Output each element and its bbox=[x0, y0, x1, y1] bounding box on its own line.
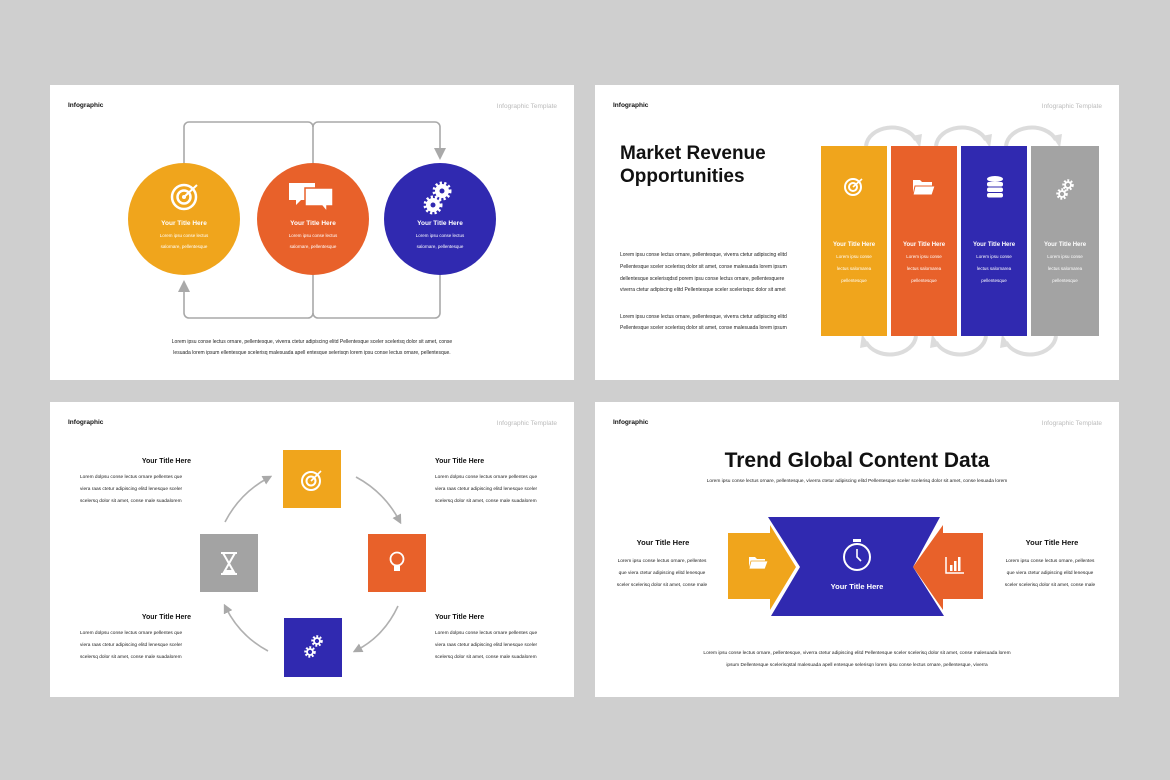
circle: orange: Lorem ipsu conse lectus bbox=[289, 233, 338, 238]
square: gray bbox=[200, 534, 258, 592]
body text bbox=[172, 339, 452, 356]
arrow: orange bbox=[913, 525, 983, 610]
text block: left bbox=[617, 538, 708, 588]
bar: blue: lectus salornarea bbox=[977, 266, 1012, 271]
center ribbon: blue bbox=[768, 517, 944, 616]
circle: orange: salornare, pellentesque bbox=[290, 244, 337, 249]
title: Trend Global Content Data bbox=[725, 449, 990, 472]
square: orange bbox=[368, 534, 426, 592]
bar: yellow: Your Title Here bbox=[833, 242, 876, 248]
bar: yellow: Lorem ipsu conse bbox=[836, 254, 872, 259]
text block: bottom-right: viera raas ctetur adipiscing elitd lenesque sceler bbox=[435, 642, 538, 648]
bar: gray: Lorem ipsu conse bbox=[1047, 254, 1083, 259]
arrowheads bbox=[434, 148, 446, 160]
header template label: Infographic Template bbox=[497, 420, 557, 427]
text block: bottom-left: Your Title Here bbox=[142, 614, 191, 621]
text block: top-right: scelersq dolor sit amet, conse male suadalorem bbox=[435, 498, 537, 504]
paragraph: dellentesque scelerisqdsd porem ipsu conse lectus ornare, pellentesquere bbox=[620, 276, 784, 282]
body text: ipsum Dellentesque scelerisqstal malesuada apell entesque selerisqn lorem ipsu conse lectus ornare, pellentesque, viverra bbox=[726, 662, 988, 668]
bar: blue: Lorem ipsu conse bbox=[976, 254, 1012, 259]
title: Market Revenue bbox=[620, 143, 766, 164]
text block: right bbox=[1005, 538, 1096, 588]
text block: bottom-left: Lorem dolpsu conse lectus ornare pellentes que bbox=[80, 630, 182, 636]
panel: market revenue bbox=[595, 85, 1119, 380]
paragraph bbox=[620, 252, 787, 331]
text block: left: Your Title Here bbox=[637, 538, 689, 547]
text block: top-left: scelersq dolor sit amet, conse male suadalorem bbox=[80, 498, 182, 504]
paragraph: viverra ctetur adipiscing elitd Pellentesque sceler scelerisqsc dolor sit amet bbox=[620, 287, 786, 293]
header template label: Infographic Template bbox=[1042, 420, 1102, 427]
text block: top-right bbox=[435, 458, 538, 504]
body text: Lorem ipsu conse lectus ornare, pellentesque, viverra ctetur adipiscing elitd Pellentesque sceler scelerisq dolor sit amet, conse malesuada lorem bbox=[703, 650, 1011, 656]
text block: top-right: viera raas ctetur adipiscing elitd lenesque sceler bbox=[435, 486, 538, 492]
header label: Infographic bbox=[613, 102, 649, 109]
bar: blue: Your Title Here bbox=[973, 242, 1016, 248]
circle: orange: Your Title Here bbox=[290, 220, 336, 227]
paragraph: Pellentesque sceler scelerisq dolor sit amet, conse malesuada lorem ipsum bbox=[620, 325, 787, 331]
connector lines bbox=[184, 122, 440, 318]
bar: gray: pellentesque bbox=[1052, 278, 1078, 283]
subtitle: Lorem ipsu conse lectus ornare, pellentesque, viverra ctetur adipiscing elitd Pellentesque sceler scelerisq dolor sit amet, conse lesuada lorem bbox=[707, 478, 1007, 484]
circle: yellow bbox=[128, 163, 240, 275]
text block: bottom-right: scelersq dolor sit amet, conse male suadalorem bbox=[435, 654, 537, 660]
text block: right: Your Title Here bbox=[1026, 538, 1078, 547]
text block: top-left: Your Title Here bbox=[142, 458, 191, 465]
panel: market revenue: Opportunities bbox=[620, 166, 745, 187]
header template label: Infographic Template bbox=[1042, 103, 1102, 110]
header template label: Infographic Template bbox=[497, 103, 557, 110]
body text bbox=[703, 650, 1011, 668]
text block: top-right: Lorem dolpsu conse lectus ornare pellentes que bbox=[435, 474, 537, 480]
circle: yellow: Your Title Here bbox=[161, 220, 207, 227]
circle: yellow: salornare, pellentesque bbox=[161, 244, 208, 249]
panel: four-square cycle bbox=[50, 402, 574, 697]
header label: Infographic bbox=[613, 419, 649, 426]
text block: bottom-right: Your Title Here bbox=[435, 614, 484, 621]
bar: yellow bbox=[821, 146, 887, 336]
bar: orange: lectus salornarea bbox=[907, 266, 942, 271]
paragraph: Lorem ipsu conse lectus ornare, pellentesque, viverra ctetur adipiscing elitd bbox=[620, 252, 787, 258]
cycle arrows bbox=[225, 477, 399, 651]
arrow: yellow bbox=[728, 525, 796, 610]
panel: trend global content bbox=[595, 402, 1119, 697]
square: blue bbox=[284, 618, 342, 677]
text block: bottom-left: viera raas ctetur adipiscing elitd lenesque sceler bbox=[80, 642, 183, 648]
text block: left: sceler scelerisq dolor sit amet, conse male bbox=[617, 582, 708, 588]
text block: bottom-left bbox=[80, 614, 191, 660]
square: yellow bbox=[283, 450, 341, 508]
text block: bottom-right: Lorem dolpsu conse lectus ornare pellentes que bbox=[435, 630, 537, 636]
circle: blue: Lorem ipsu conse lectus bbox=[416, 233, 465, 238]
bar: blue: pellentesque bbox=[981, 278, 1007, 283]
text block: top-left: Lorem dolpsu conse lectus ornare pellentes que bbox=[80, 474, 182, 480]
circle: blue: Your Title Here bbox=[417, 220, 463, 227]
text block: right: sceler scelerisq dolor sit amet, conse male bbox=[1005, 582, 1096, 588]
text block: bottom-left: scelersq dolor sit amet, conse male suadalorem bbox=[80, 654, 182, 660]
circle: blue: salornare, pellentesque bbox=[417, 244, 464, 249]
bar: orange bbox=[891, 146, 957, 336]
panel: circles cycle bbox=[50, 85, 574, 380]
text block: left: Lorem ipsu conse lectus ornare, pellentes bbox=[618, 558, 707, 564]
bar: gray bbox=[1031, 146, 1099, 336]
circle: blue bbox=[384, 163, 496, 275]
text block: top-right: Your Title Here bbox=[435, 458, 484, 465]
text block: right: que viera ctetur adipiscing elitd lenesque bbox=[1007, 570, 1094, 576]
header label: Infographic bbox=[68, 102, 104, 109]
bar: yellow: pellentesque bbox=[841, 278, 867, 283]
text block: left: que viera ctetur adipiscing elitd lenesque bbox=[619, 570, 706, 576]
bar: orange: Your Title Here bbox=[903, 242, 946, 248]
bar: yellow: lectus salornarea bbox=[837, 266, 872, 271]
body text: lesuada lorem ipsum ellentesque scelerisq malesuada apell entesque selerisqn lorem ipsu conse lectus ornare, pellentesque. bbox=[173, 350, 451, 356]
bar: blue bbox=[961, 146, 1027, 336]
text block: top-left: viera raas ctetur adipiscing elitd lenesque sceler bbox=[80, 486, 183, 492]
text block: top-left bbox=[80, 458, 191, 504]
bar: orange: Lorem ipsu conse bbox=[906, 254, 942, 259]
text block: right: Lorem ipsu conse lectus ornare, pellentes bbox=[1006, 558, 1095, 564]
text block: bottom-right bbox=[435, 614, 538, 660]
arcs bbox=[866, 128, 1056, 354]
circle: yellow: Lorem ipsu conse lectus bbox=[160, 233, 209, 238]
header label: Infographic bbox=[68, 419, 104, 426]
bar: gray: lectus salornarea bbox=[1048, 266, 1083, 271]
bar: orange: pellentesque bbox=[911, 278, 937, 283]
paragraph: Lorem ipsu conse lectus ornare, pellentesque, viverra ctetur adipiscing elitd bbox=[620, 314, 787, 320]
body text: Lorem ipsu conse lectus ornare, pellentesque, viverra ctetur adipiscing elitd Pellentesque sceler scelerisq dolor sit amet, conse bbox=[172, 339, 452, 345]
circle: orange bbox=[257, 163, 369, 275]
paragraph: Pellentesque sceler scelerisq dolor sit amet, conse malesuada lorem ipsum bbox=[620, 264, 787, 270]
center ribbon: blue: Your Title Here bbox=[831, 582, 883, 591]
bar: gray: Your Title Here bbox=[1044, 242, 1087, 248]
